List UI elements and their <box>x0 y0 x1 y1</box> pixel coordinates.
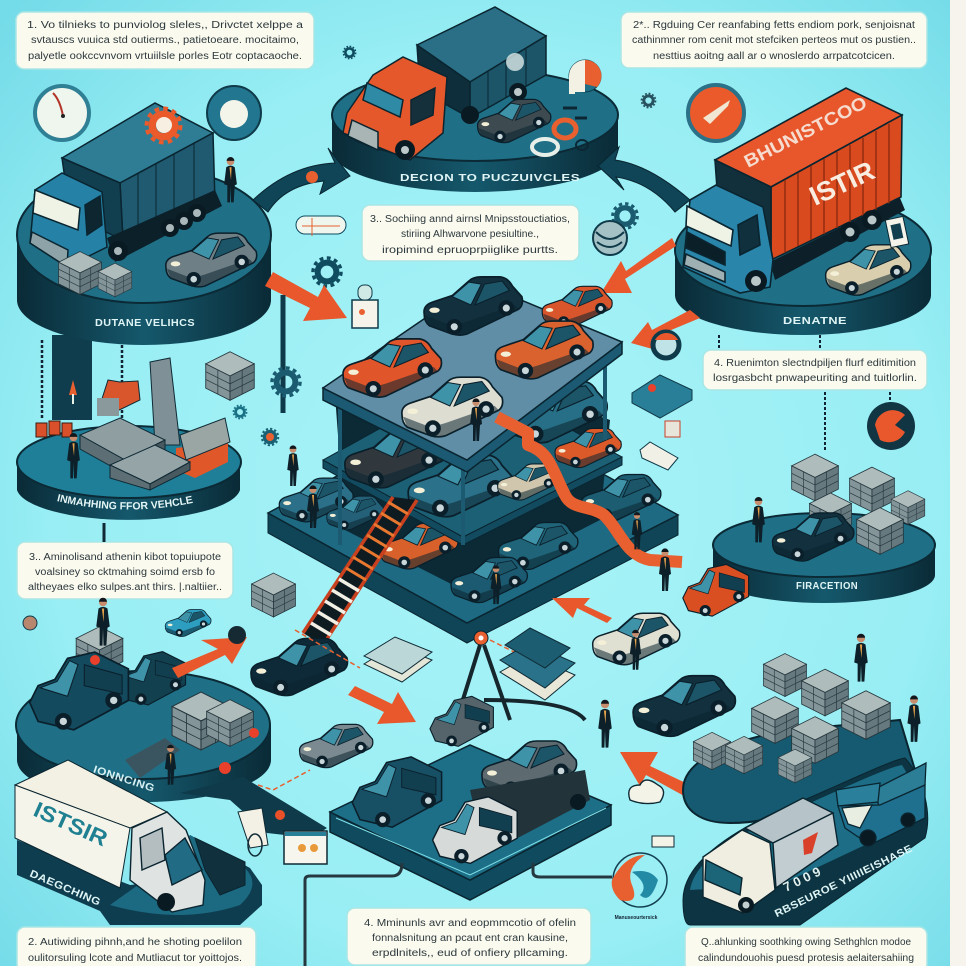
panel: tow truck platform <box>330 645 611 900</box>
person at front <box>165 745 176 785</box>
text: step 3 left: 3.. Aminolisand athenin kibot topuiupote <box>29 552 221 563</box>
dark road <box>683 758 928 925</box>
orange wreck vehicle <box>683 564 749 616</box>
white battery <box>640 442 678 470</box>
truck chassis <box>107 190 222 262</box>
person standing <box>659 548 671 591</box>
top deck cars <box>343 277 612 437</box>
icon: teal splash circle <box>207 86 261 140</box>
icon: orange tool circle <box>688 85 744 141</box>
icon: ring <box>653 332 679 358</box>
drum <box>675 250 931 335</box>
label: DAEGCHING <box>28 868 102 909</box>
person <box>630 630 641 670</box>
bottom deck cars <box>279 475 661 603</box>
small device <box>652 836 674 847</box>
dark car <box>633 676 735 736</box>
platform drum <box>17 235 271 345</box>
platform side <box>330 805 611 900</box>
shadow core <box>335 370 610 590</box>
label: loading platform: IONNCING <box>92 764 156 795</box>
person near platform <box>598 700 612 748</box>
parts box <box>632 375 692 418</box>
blue cab <box>683 185 773 293</box>
text: step 3 left: altheyaes elko sulpes.ant thirs. |.naltiier.. <box>28 582 222 593</box>
text: step 3 centre <box>362 205 579 261</box>
text: step 1 <box>16 12 314 69</box>
drum <box>17 725 271 802</box>
text: step Q bottom right: calindundouohis puesd protesis aelaitersahiing <box>698 953 914 964</box>
wheels <box>570 794 586 810</box>
people on stack <box>287 398 642 604</box>
label: DUTANE VELIHCS <box>95 317 195 329</box>
top <box>713 513 935 577</box>
chassis <box>770 198 905 280</box>
box decal <box>803 832 818 855</box>
arrow badge <box>306 171 318 183</box>
arrow: orange to central stack right <box>601 238 676 293</box>
large black car <box>251 638 348 696</box>
top <box>17 426 241 498</box>
stacks of books <box>364 637 432 682</box>
crane <box>455 645 585 725</box>
truck wheels <box>108 204 206 261</box>
middle deck cars <box>345 381 621 517</box>
arrow: orange upper right <box>172 637 247 678</box>
person <box>752 497 765 542</box>
text: step 2 bottom left <box>17 927 256 966</box>
arrow: orange from blocks <box>620 752 692 797</box>
orange ribbon <box>497 417 682 562</box>
text: step 4 right: losrgasbcht pnwapeuriting and tuitlorlin. <box>713 373 917 384</box>
person on top <box>854 634 868 682</box>
dark truck <box>352 757 442 827</box>
icon: orange target circle <box>867 402 915 450</box>
red chip <box>665 421 680 437</box>
crate device <box>252 573 295 617</box>
text: step 3 centre: iropimind epruoprpiiglike purtts. <box>382 245 558 256</box>
panel: top centre platform <box>332 7 618 192</box>
arrow: orange to central stack left <box>265 272 347 321</box>
blue truck <box>836 763 926 846</box>
text: step 3 centre: 3.. Sochiing annd airnsl Mnipsstouctiatios, <box>370 214 570 225</box>
white car <box>593 613 680 665</box>
arrow: orange to tow platform <box>348 686 416 724</box>
text: step 1: svtauscs vuuica std outierms., patietoeare. mocitaimo, <box>31 35 299 46</box>
ramp <box>125 738 180 778</box>
icon: cloud <box>629 780 664 804</box>
container top text: BHUNISTCOO <box>741 92 870 172</box>
text: step 2: 2*.. Rgduing Cer reanfabing fetts endiom pork, senjoisnat <box>633 20 915 31</box>
panel: right lower blocks platform <box>683 634 921 823</box>
text: step 2 bottom left: oulitorsuling lcote and Mutliacut tor yoittojos. <box>28 953 242 964</box>
orange truck <box>97 380 140 416</box>
box marker <box>648 384 656 392</box>
trailing box <box>195 838 245 895</box>
top <box>332 69 618 161</box>
dashed orange line <box>258 630 530 790</box>
icon: small gear <box>233 405 247 419</box>
tool: wrench pole <box>280 295 286 413</box>
drum <box>17 462 240 520</box>
dark arrow: loading to tow platform <box>180 777 327 838</box>
bottom deck <box>268 403 678 643</box>
icon: note with coil <box>238 808 268 856</box>
icon: note card <box>352 285 378 328</box>
icon: small gear top right <box>641 93 656 108</box>
container side text: ISTIR <box>805 156 879 211</box>
drum <box>713 545 935 603</box>
panel: bottom right route with white truck <box>683 758 928 925</box>
teal plate <box>110 835 252 915</box>
person on truck <box>96 598 110 646</box>
box top <box>15 760 167 828</box>
drum <box>332 115 618 192</box>
icon: pole gear <box>272 368 300 396</box>
label: FIRACETION <box>796 580 858 592</box>
icon: small gear <box>343 46 356 59</box>
locator pin <box>474 631 488 645</box>
panel: fraction platform <box>713 454 935 603</box>
side parts near stack <box>632 375 692 470</box>
crates <box>792 454 925 554</box>
gear badge <box>23 616 37 630</box>
platform top <box>330 745 611 880</box>
arrow: left truck to centre platform <box>253 148 350 212</box>
truck side numbers: 7 0 0 9 <box>781 864 823 895</box>
vans <box>118 652 186 705</box>
cab <box>130 812 205 912</box>
car <box>166 233 257 287</box>
top deck <box>323 282 622 472</box>
grey car <box>300 724 373 768</box>
label: RBSEUROE YIIIIIEISHASE <box>773 843 915 920</box>
text: step 4 bottom centre: fonnalsnitung an pcaut ent cran kausine, <box>372 933 568 944</box>
middle deck <box>323 377 622 545</box>
text: step 1: 1. Vo tilnieks to punviolog sleles,, Drivctet xelppe a <box>27 20 304 31</box>
dark platform <box>17 835 262 925</box>
text: step Q bottom right <box>685 927 927 966</box>
icon: window card <box>284 831 327 864</box>
icon: swirl <box>612 853 667 907</box>
icon: gear centre left <box>313 258 341 286</box>
white truck box <box>703 798 838 913</box>
container <box>417 7 546 118</box>
person <box>224 157 237 202</box>
orange skip <box>176 442 228 478</box>
box side <box>15 785 130 888</box>
orange signs <box>36 421 72 437</box>
panel: left lower platform, loading <box>16 598 271 802</box>
sign <box>885 216 909 248</box>
text: step 4 bottom centre <box>347 908 591 965</box>
text: step 4 right: 4. Ruenimton slectndpiljen flurf editimition <box>714 358 916 369</box>
ladder <box>303 497 417 645</box>
connector pipe right <box>533 863 612 877</box>
arrow: orange lower right <box>631 310 700 350</box>
car <box>478 99 551 143</box>
top <box>675 194 931 306</box>
label: DECION TO PUCZUIVCLES <box>400 172 580 184</box>
platform top <box>17 167 271 303</box>
wall <box>150 358 180 445</box>
platform edge highlight <box>336 808 606 875</box>
connector <box>102 523 106 542</box>
platform <box>683 720 915 823</box>
brick panel <box>180 418 230 460</box>
icon: small gear orange core <box>262 429 278 445</box>
truck cab <box>30 173 107 267</box>
teal surface <box>690 765 916 890</box>
badge on arrow <box>228 626 246 644</box>
panel: middle left platform, sorting <box>16 357 242 520</box>
truck wheels <box>738 897 754 913</box>
text: step 4 bottom centre: erpdlnitels,, eud of onfiery pllcaming. <box>372 948 568 959</box>
rack one <box>80 418 165 474</box>
flatbed <box>470 770 590 842</box>
connectors under right panel <box>719 335 890 450</box>
box text: ISTSIR <box>30 797 111 851</box>
white truck <box>433 797 517 863</box>
panel: central parking stack <box>268 277 682 645</box>
panel: bottom left white truck <box>15 760 262 925</box>
crates <box>172 692 230 750</box>
icon: gauge <box>35 86 89 140</box>
text: step 2 bottom left: 2. Autiwiding pihnh,and he shoting poelilon <box>28 937 242 948</box>
text: step 3 centre: stiriing Alhwarvone pesiultine., <box>401 229 539 240</box>
text: step 2 <box>621 12 927 68</box>
wheels <box>745 210 882 292</box>
car <box>773 513 854 561</box>
crate stack <box>206 352 254 400</box>
top <box>16 671 270 779</box>
swirl caption: Manuseourtersick <box>615 915 658 921</box>
person right <box>907 695 921 742</box>
orange cab <box>343 57 447 160</box>
panel: top left platform, truck <box>17 103 271 345</box>
text: step 3 left <box>17 542 233 599</box>
cab wheel <box>157 893 175 911</box>
crate stacks <box>693 654 890 783</box>
dark connector column between platforms <box>42 335 122 420</box>
label: DENATNE <box>783 315 847 327</box>
posts <box>340 360 605 545</box>
icon: orange marker <box>275 810 285 820</box>
icon: gear with coil <box>593 204 637 255</box>
icon: half orange marker <box>569 60 601 94</box>
arrow: orange from stack <box>552 598 612 623</box>
icon: small gauge pill <box>296 216 346 236</box>
text: step 4 right <box>703 350 927 390</box>
text: step 2: nesttius aoitng aall ar o wnoslerdo arrpatcotcicen. <box>653 51 895 62</box>
right margin strip <box>950 0 966 966</box>
text: step 4 bottom centre: 4. Mminunls avr and eopmmcotio of ofelin <box>364 918 576 929</box>
crane cab <box>430 696 493 746</box>
text: step 3 left: voalsiney so cktmahing soimd ersb fo <box>35 567 215 578</box>
panel: top right platform, orange container truck <box>675 88 931 335</box>
text: step 2: cathinmner rom cenit mot stefciken perteos mut os pustien.. <box>632 35 916 46</box>
text: step Q bottom right: Q..ahlunking soothking owing Sethghlcn modoe <box>701 937 911 948</box>
crate under person <box>76 627 123 673</box>
connector pipe left <box>305 863 402 966</box>
label: INMAHHING FFOR VEHCLE <box>57 494 193 510</box>
car on flatbed <box>482 741 577 797</box>
stacks of books right <box>500 628 575 700</box>
orange markers <box>90 655 259 774</box>
container <box>715 88 902 260</box>
text: step 1: palyetle ookccvnvom vrtuiilsle porles Eotr coptacaoche. <box>28 51 302 62</box>
rack two <box>110 445 190 490</box>
person <box>67 433 80 478</box>
beige car <box>826 245 911 295</box>
curved label path <box>45 498 205 510</box>
crates <box>59 252 101 294</box>
wheels <box>395 83 527 160</box>
truck container <box>62 103 215 240</box>
container decal <box>506 53 524 71</box>
arrow: right truck to centre platform <box>598 147 690 212</box>
icon: orange gear <box>147 109 180 142</box>
small blue car <box>165 609 211 637</box>
parts <box>532 108 588 155</box>
